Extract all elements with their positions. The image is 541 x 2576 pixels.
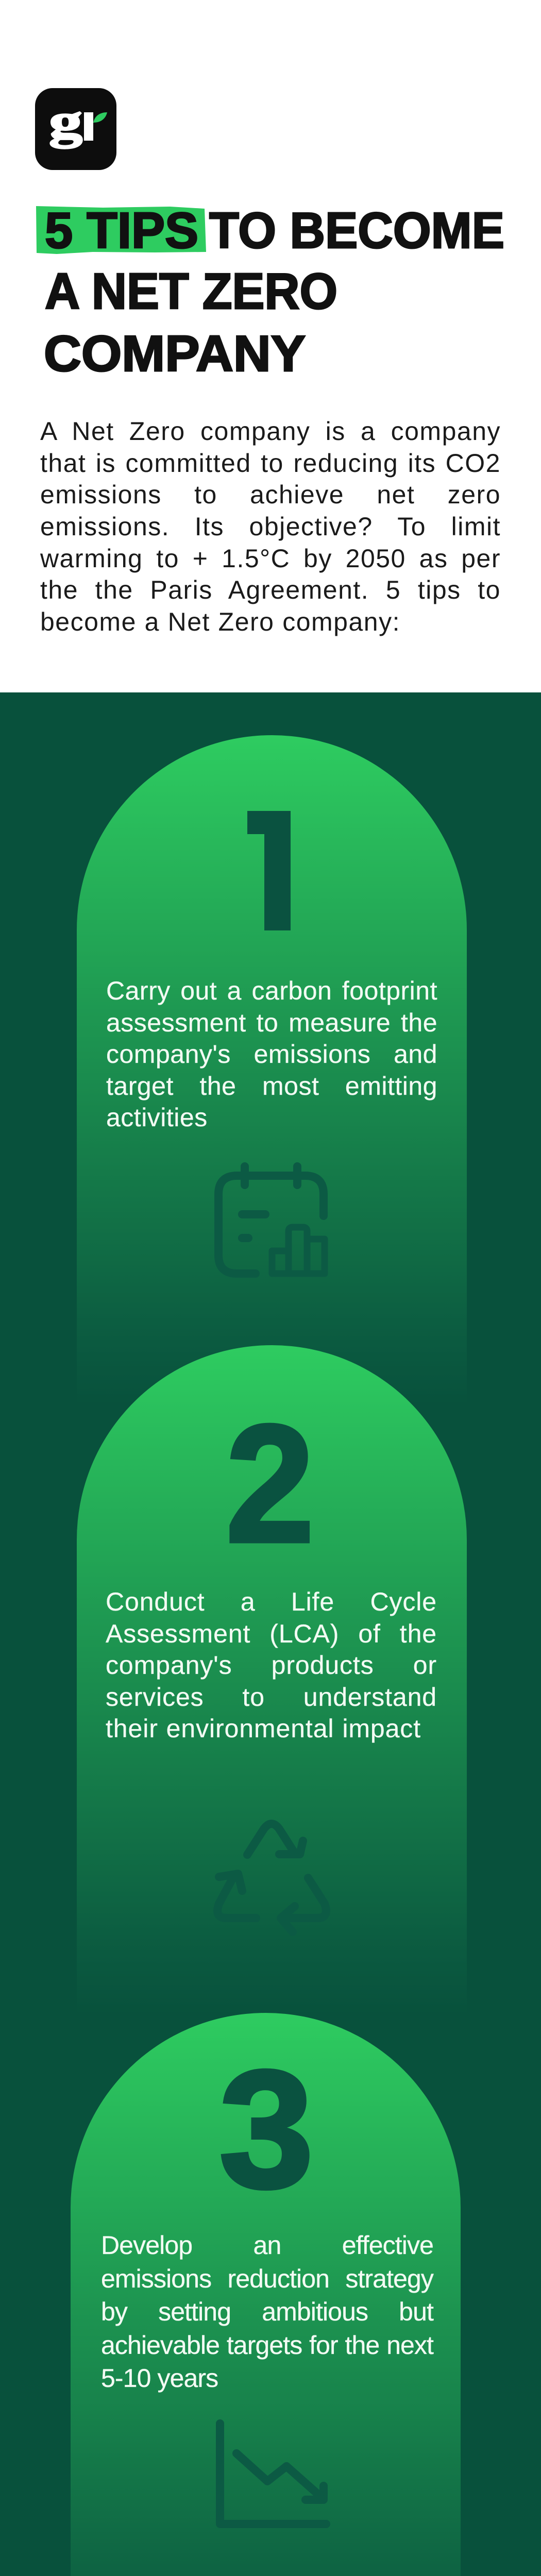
- title: [36, 202, 504, 381]
- tip 2 text: Assessment (LCA) of the: [106, 1619, 437, 1648]
- tip 3 text: emissions reduction strategy: [101, 2264, 433, 2293]
- tip 1 text: activities: [106, 1103, 208, 1132]
- header logo: gr app icon: g: [49, 93, 82, 148]
- title: 5 TIPS: [45, 202, 198, 259]
- intro paragraph: emissions. Its objective? To limit: [40, 512, 501, 541]
- number 2: 2: [226, 1390, 314, 1577]
- tip 3 text: achievable targets for the next: [101, 2331, 433, 2360]
- dark green background band: [0, 692, 541, 2576]
- title: COMPANY: [44, 325, 306, 381]
- tip 3 text: 5-10 years: [101, 2364, 218, 2393]
- icon: declining line chart: [220, 2424, 326, 2524]
- intro paragraph: the the Paris Agreement. 5 tips to: [40, 575, 501, 604]
- tip 1 text: Carry out a carbon footprint: [106, 976, 437, 1005]
- tip 1 text: target the most emitting: [106, 1072, 437, 1100]
- tip 2 text: their environmental impact: [106, 1714, 421, 1743]
- title highlight: 5 TIPS: [36, 206, 206, 254]
- tip 2 text: services to understand: [106, 1683, 437, 1711]
- title: A NET ZERO: [45, 263, 337, 319]
- tip 2 text: company's products or: [106, 1651, 437, 1680]
- panel: tip 2: [77, 1345, 467, 2015]
- header logo: gr app icon: [35, 88, 116, 170]
- intro paragraph: become a Net Zero company:: [40, 607, 400, 636]
- icon: calendar with bar chart: [218, 1166, 325, 1274]
- tip 1 text: company's emissions and: [106, 1040, 437, 1069]
- number 3: 3: [219, 2036, 314, 2223]
- panel: tip 3: [71, 2013, 461, 2576]
- tip 3 text: by setting ambitious but: [101, 2297, 433, 2326]
- icon: recycle arrows: [217, 1824, 326, 1932]
- intro paragraph: A Net Zero company is a company: [40, 417, 501, 446]
- tip 1 text: [106, 976, 437, 1132]
- intro paragraph: that is committed to reducing its CO2: [40, 449, 501, 478]
- number 1: 1: [232, 776, 309, 967]
- tip 2 text: Conduct a Life Cycle: [106, 1587, 437, 1616]
- tip 1 text: assessment to measure the: [106, 1008, 437, 1037]
- tip 3 text: [101, 2231, 434, 2393]
- tip 2 text: [105, 1587, 437, 1743]
- intro paragraph: [40, 417, 501, 636]
- intro paragraph: warming to + 1.5°C by 2050 as per: [40, 544, 501, 573]
- title: TO BECOME: [209, 202, 504, 259]
- intro paragraph: emissions to achieve net zero: [40, 480, 501, 509]
- panel: tip 1: [77, 735, 467, 1405]
- tip 3 text: Develop an effective: [101, 2231, 433, 2260]
